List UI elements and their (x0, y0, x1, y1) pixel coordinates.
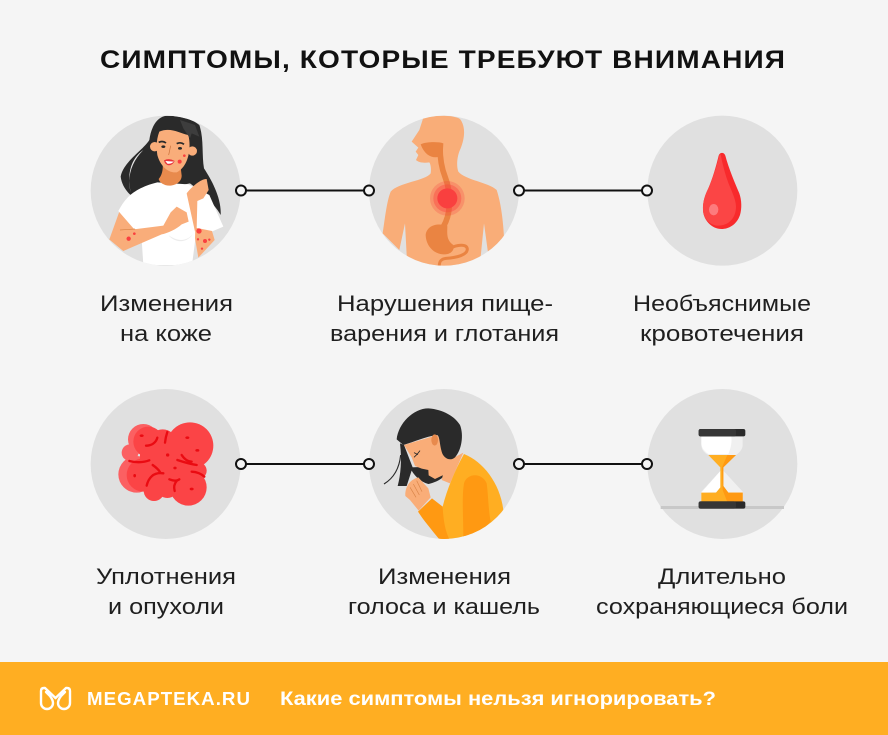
icon: coughing woman (369, 389, 519, 542)
connector: digestion to bleeding (514, 186, 652, 196)
label: voice changes and cough: Изменения (378, 564, 511, 589)
label: persistent pain: сохраняющиеся боли (596, 594, 848, 619)
icon: blood drop (647, 116, 797, 266)
label: lumps and tumors: и опухоли (108, 594, 224, 619)
label: skin changes (100, 291, 233, 346)
label: voice changes and cough: голоса и кашель (348, 594, 540, 619)
label: unexplained bleeding: Необъяснимые (633, 291, 811, 316)
label: digestion and swallowing: Нарушения пище- (337, 291, 553, 316)
connector: cough to pain (514, 459, 652, 469)
connector: skin to digestion (236, 186, 374, 196)
label: digestion and swallowing (330, 291, 559, 346)
connector: lumps to cough (236, 459, 374, 469)
logo: M mark (41, 688, 70, 709)
label: lumps and tumors: Уплотнения (96, 564, 236, 589)
footer bar (0, 662, 888, 735)
icon: digestive tract silhouette (369, 116, 519, 267)
title: СИМПТОМЫ, КОТОРЫЕ ТРЕБУЮТ ВНИМАНИЯ (100, 46, 786, 74)
icon: hourglass (647, 389, 797, 539)
label: digestion and swallowing: варения и глотания (330, 321, 559, 346)
icon: red lumps (91, 389, 241, 539)
footer question: Какие симптомы нельзя игнорировать? (280, 689, 716, 710)
label: persistent pain: Длительно (658, 564, 786, 589)
label: skin changes: Изменения (100, 291, 233, 316)
label: unexplained bleeding (633, 291, 811, 346)
label: skin changes: на коже (120, 321, 212, 346)
logo text: MEGAPTEKA.RU (87, 689, 251, 709)
icon: woman with skin rash (91, 116, 241, 266)
label: lumps and tumors (96, 564, 236, 619)
label: persistent pain (596, 564, 848, 619)
label: voice changes and cough (348, 564, 540, 619)
label: unexplained bleeding: кровотечения (640, 321, 804, 346)
